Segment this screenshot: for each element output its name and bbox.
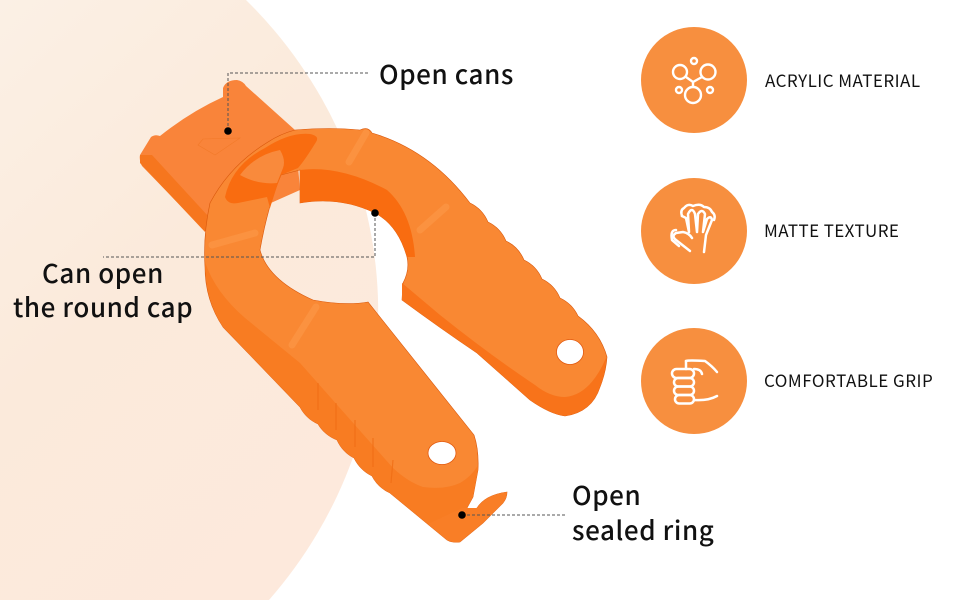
inner wall of ring bbox=[300, 169, 415, 257]
product: orange jar opener bbox=[140, 80, 607, 542]
hook tip bbox=[428, 492, 507, 542]
callout: open sealed ring bbox=[458, 476, 714, 548]
leader line bbox=[228, 73, 370, 131]
right handle end hole bbox=[556, 340, 584, 364]
lower handle side face bbox=[205, 262, 478, 540]
callout: open cans bbox=[224, 55, 514, 135]
ring ridges bbox=[212, 133, 446, 345]
feature: comfortable grip bbox=[641, 328, 933, 434]
feature: matte texture bbox=[641, 178, 899, 284]
marker dot bbox=[458, 511, 466, 519]
label: MATTE TEXTURE bbox=[764, 217, 899, 242]
icon: molecule bbox=[673, 58, 716, 103]
marker dot bbox=[371, 209, 379, 217]
right handle side face bbox=[402, 283, 606, 416]
background peach circle bbox=[0, 0, 378, 600]
lower handle end hole bbox=[428, 442, 456, 464]
label: Can open bbox=[42, 254, 164, 291]
icon circle bbox=[641, 27, 747, 133]
left cavity of ring bbox=[225, 134, 317, 208]
label: COMFORTABLE GRIP bbox=[764, 367, 933, 392]
label: ACRYLIC MATERIAL bbox=[765, 67, 921, 92]
cavity highlight bbox=[240, 150, 284, 183]
label: sealed ring bbox=[572, 511, 714, 548]
icon: fist bbox=[672, 360, 717, 404]
label: Open cans bbox=[379, 55, 514, 92]
callout: can open the round cap bbox=[13, 209, 379, 325]
icon circle bbox=[641, 178, 747, 284]
can opener plate bbox=[140, 80, 300, 232]
leader line bbox=[462, 514, 565, 516]
marker dot bbox=[224, 127, 232, 135]
feature: acrylic material bbox=[641, 27, 921, 133]
label: Open bbox=[572, 476, 641, 513]
icon circle bbox=[641, 328, 747, 434]
leader line bbox=[103, 213, 375, 257]
lower handle grip ridges bbox=[318, 383, 393, 483]
ring and handles body bbox=[205, 128, 607, 542]
label: the round cap bbox=[13, 288, 193, 325]
icon: hand bbox=[672, 205, 715, 252]
